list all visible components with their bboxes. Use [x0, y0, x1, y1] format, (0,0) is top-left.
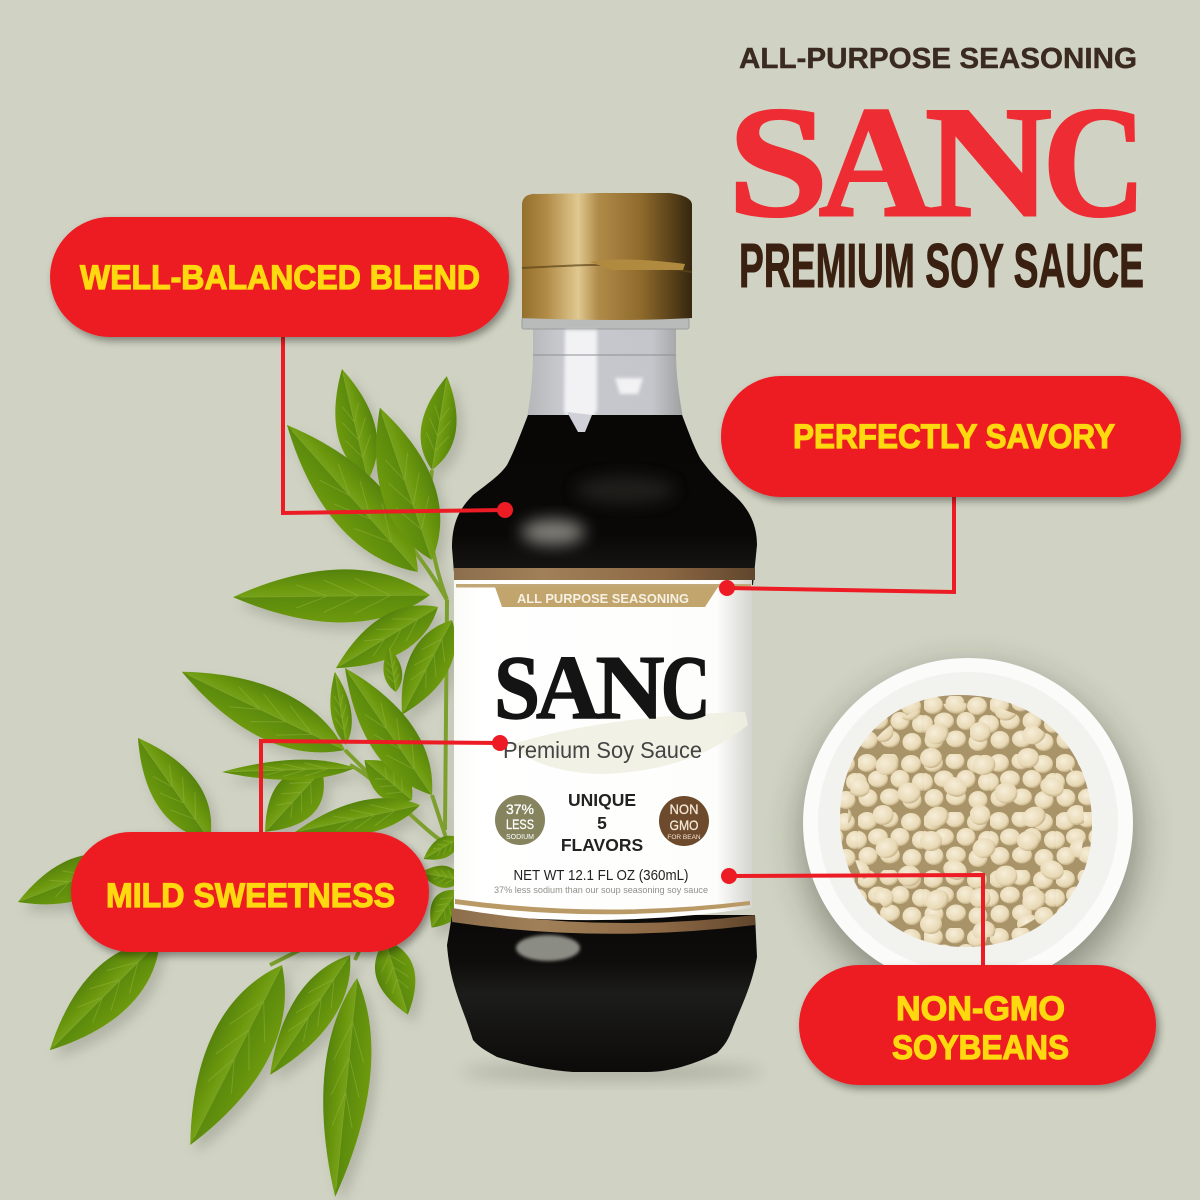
badge: non gmo: FOR BEAN	[667, 834, 701, 841]
connector line	[727, 495, 954, 592]
connector line	[729, 875, 983, 967]
label	[454, 580, 752, 920]
bottle	[447, 193, 762, 1081]
title: SANC: A	[819, 75, 933, 250]
connector line	[261, 741, 500, 834]
badge: non gmo: GMO	[670, 817, 699, 833]
label flavors text: UNIQUE	[568, 790, 636, 810]
neck ring	[522, 318, 689, 329]
pill text	[892, 990, 1069, 1067]
neck highlights	[564, 330, 643, 432]
badge: 37% less sodium: LESS	[506, 816, 534, 832]
cap	[522, 193, 692, 320]
pill	[50, 217, 509, 337]
label brand: A	[536, 638, 600, 738]
title block	[728, 43, 1146, 301]
label swash	[510, 712, 748, 774]
connector dot	[497, 502, 513, 518]
label gold stripe	[455, 899, 750, 914]
callout: perfectly savory	[719, 376, 1181, 596]
callout: mild sweetness	[71, 735, 508, 952]
soybean bowl	[802, 658, 1138, 1006]
title: SANC	[728, 74, 1146, 250]
title: SANC: N	[925, 75, 1052, 250]
connector dot	[719, 580, 735, 596]
label flavors text: 5	[597, 813, 607, 833]
badge: 37% less sodium: 37%	[506, 801, 534, 817]
sauce body lower	[447, 915, 757, 1072]
sauce body upper	[452, 415, 757, 585]
label brand	[494, 636, 710, 738]
sauce reflection lower	[516, 935, 580, 961]
label net weight: NET WT 12.1 FL OZ (360mL)	[514, 868, 688, 884]
label fine print: 37% less sodium than our soup seasoning soy sauce	[494, 885, 708, 895]
label brand: C	[661, 638, 710, 738]
pill	[799, 965, 1156, 1085]
pill text: SOYBEANS	[892, 1029, 1069, 1067]
label flavors text: FLAVORS	[561, 835, 643, 855]
badge: non gmo: NON	[670, 801, 698, 817]
badge: non gmo	[659, 796, 709, 846]
connector line	[283, 335, 505, 513]
pill text: PERFECTLY SAVORY	[793, 418, 1115, 456]
connector dot	[721, 868, 737, 884]
bottle shadow	[462, 1063, 762, 1081]
banner text: ALL PURPOSE SEASONING	[517, 592, 689, 606]
clear neck	[527, 326, 683, 418]
label band top	[454, 568, 755, 580]
soybeans	[840, 695, 1092, 947]
label flavors text	[561, 790, 643, 855]
label brand: N	[596, 638, 665, 738]
label band bottom	[452, 908, 755, 934]
title: SANC: C	[1043, 74, 1146, 250]
badge: 37% less sodium: SODIUM	[506, 834, 534, 841]
connector dot	[492, 735, 508, 751]
badge: 37% less sodium	[495, 795, 545, 845]
label stripe	[456, 584, 751, 588]
label subtitle: Premium Soy Sauce	[503, 737, 702, 763]
title: all-purpose seasoning: ALL-PURPOSE SEASONING	[739, 43, 1137, 75]
sauce reflection	[521, 519, 585, 545]
pill text: WELL-BALANCED BLEND	[80, 259, 480, 297]
pill text: NON-GMO	[896, 990, 1065, 1028]
label banner	[495, 587, 718, 607]
pill	[71, 832, 429, 952]
pill text: MILD SWEETNESS	[106, 877, 395, 915]
illustration: green leaves	[10, 365, 470, 1199]
bowl	[803, 658, 1133, 988]
callout: non-gmo soybeans	[721, 868, 1156, 1085]
pill	[721, 376, 1181, 497]
label brand: S	[494, 636, 540, 738]
neck highlight lower	[567, 412, 592, 432]
callout: well-balanced blend	[50, 217, 513, 518]
title: SANC: S	[728, 74, 828, 250]
bowl shadow	[802, 670, 1138, 1006]
